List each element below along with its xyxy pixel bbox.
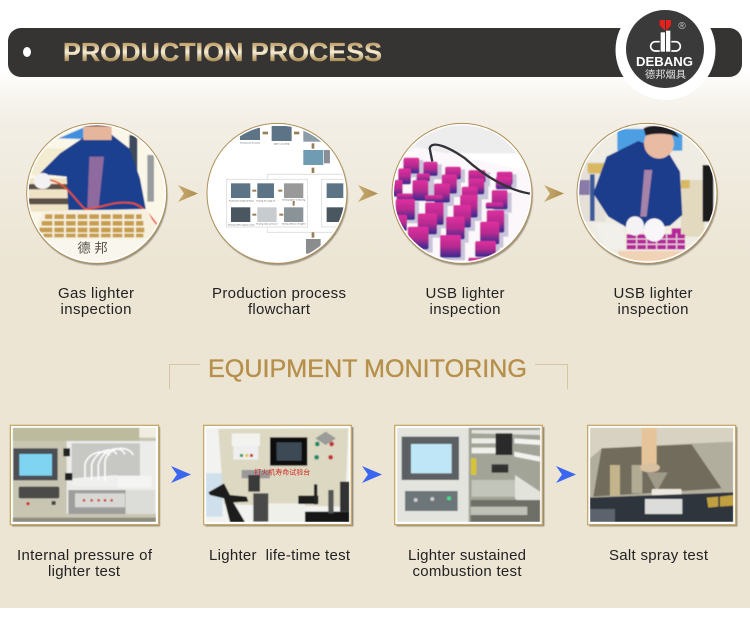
label: sustained combustion test: Lighter sustained — [408, 547, 526, 564]
label: internal pressure test: Internal pressure of — [17, 547, 153, 564]
label: gas lighter inspection: inspection — [60, 301, 132, 318]
logo: DEBANG: ® — [678, 21, 686, 32]
arrow: blue 1 — [171, 466, 191, 483]
photo circle: production flowchart — [207, 123, 358, 265]
charging cable — [430, 145, 530, 194]
machine red caption: 打火机寿命试验台 — [254, 467, 311, 476]
label: production process flowchart: flowchart — [248, 301, 311, 318]
photo: lighter life-time test machine — [204, 425, 353, 526]
photo circle: gas lighter inspection — [27, 122, 168, 266]
arrow: gold 2 — [358, 185, 378, 202]
label: salt spray test: Salt spray test — [609, 547, 709, 564]
photo circle: production flowchart: Testing defence of lighter — [282, 223, 306, 226]
label: USB lighter inspection 1: USB lighter — [426, 285, 504, 302]
arrow: gold 3 — [544, 185, 564, 202]
label: USB lighter inspection 2: inspection — [618, 301, 688, 318]
photo circle: production flowchart: Testing cost the point — [240, 142, 260, 145]
photo circle: USB lighter inspection worker — [577, 123, 718, 265]
photo circle: USB lighter inspection — [392, 123, 535, 265]
arrow: gold 1 — [178, 185, 198, 202]
label: internal pressure test: lighter test — [48, 563, 121, 580]
photo circle: production flowchart: Testing lighter in flaming — [282, 199, 306, 202]
heading: equipment monitoring: EQUIPMENT MONITORING — [208, 355, 527, 383]
label: USB lighter inspection 2: USB lighter — [614, 285, 692, 302]
header bullet dot — [23, 47, 31, 57]
photo circle: production flowchart: lighter assembly — [274, 142, 290, 145]
label: gas lighter inspection: Gas lighter — [58, 285, 134, 302]
photo circle: production flowchart: Testing the angle of — [256, 199, 275, 202]
photo: internal pressure test machine — [10, 425, 160, 526]
title: PRODUCTION PROCESS — [63, 37, 382, 67]
label: life-time test: Lighter life-time test — [209, 547, 351, 564]
label: USB lighter inspection 1: inspection — [430, 301, 500, 318]
handwritten label on tray: 德 邦 — [77, 240, 108, 255]
arrow: blue 3 — [556, 466, 576, 483]
arrow: blue 2 — [362, 466, 382, 483]
photo circle: production flowchart: Testing static pressure — [256, 223, 278, 226]
photo circle: production flowchart: Testing in ATC degree water — [228, 223, 255, 226]
logo: DEBANG — [616, 0, 716, 100]
photo circle: production flowchart: Testing the height of flame — [229, 199, 255, 202]
heading: equipment monitoring — [170, 355, 568, 389]
photo: salt spray test chamber — [588, 425, 737, 526]
label: sustained combustion test: combustion test — [412, 563, 522, 580]
logo: DEBANG: DEBANG — [636, 55, 693, 69]
photo: lighter sustained combustion test machine — [395, 425, 544, 526]
logo: DEBANG: 德邦烟具 — [645, 68, 686, 81]
label: production process flowchart: Production process — [212, 285, 346, 302]
header bar — [8, 28, 742, 77]
